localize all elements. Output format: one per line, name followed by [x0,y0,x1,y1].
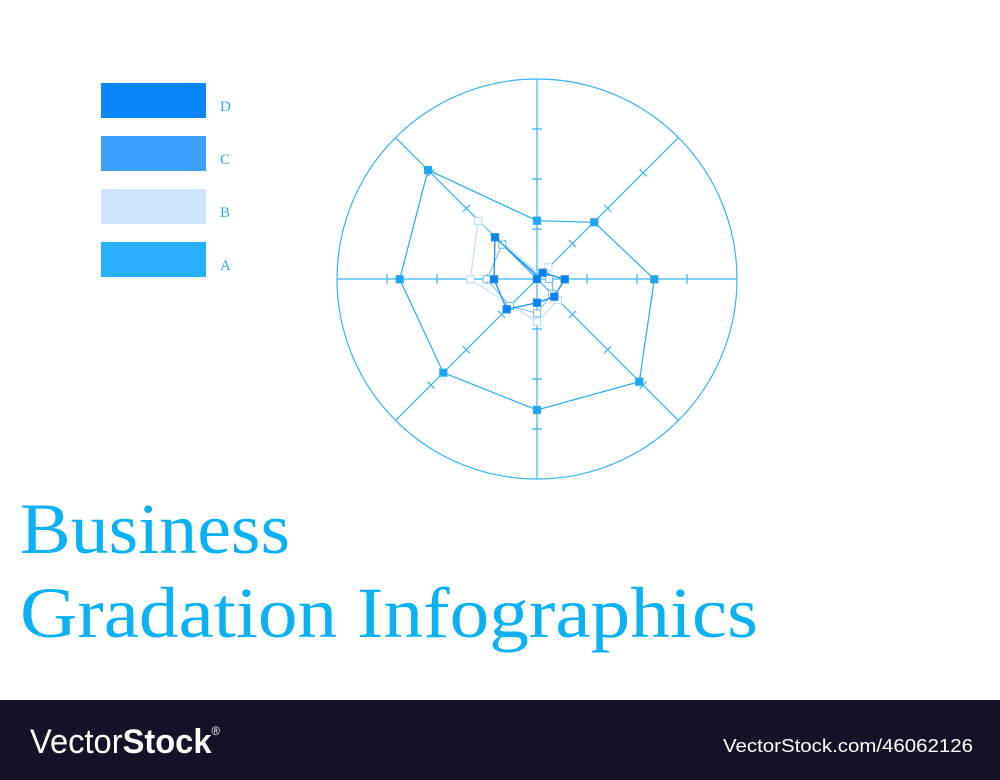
series A (outer) [396,166,658,414]
legend item C [101,136,230,171]
footer logo: ® [212,724,220,738]
footer logo: VectorStock [30,723,215,761]
footer bar [0,700,1000,780]
series D [490,234,568,313]
title: Business [20,489,290,569]
chart grid: circle and axes [337,79,737,479]
series C [483,241,556,317]
series B (lightest) [467,218,562,325]
legend item C: C [220,152,230,168]
legend item A [101,242,231,277]
legend item D [101,83,231,118]
footer id: VectorStock.com/46062126 [723,736,973,756]
legend item B: B [220,205,230,221]
legend item B [101,189,230,224]
title [20,489,758,653]
radar chart [337,79,737,479]
title: Gradation Infographics [20,573,758,653]
legend [101,83,231,277]
legend item D: D [220,99,231,115]
legend item A: A [220,258,231,274]
